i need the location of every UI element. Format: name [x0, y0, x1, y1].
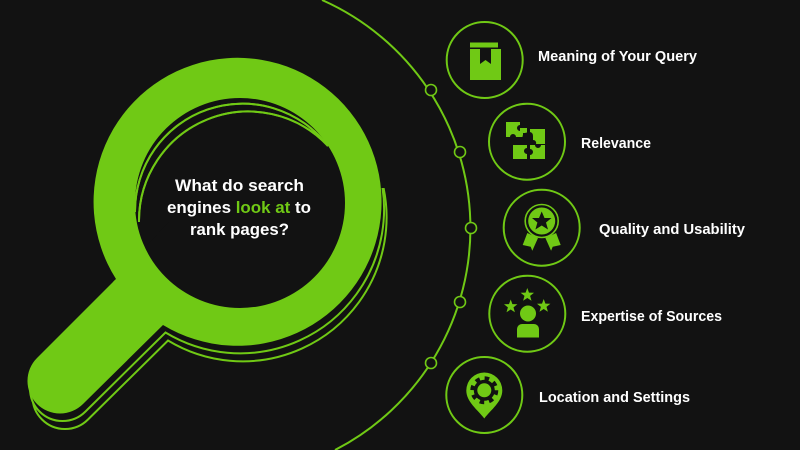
item: Relevance [489, 104, 651, 180]
item: Quality and Usability [504, 190, 745, 266]
title: rank pages? [190, 220, 289, 239]
label: Relevance [581, 136, 651, 152]
arc connector with nodes [322, 0, 476, 450]
icon: puzzle [506, 122, 545, 159]
label: Quality and Usability [599, 222, 745, 238]
icon: book [470, 42, 501, 80]
magnifying glass [27, 58, 387, 429]
label: Expertise of Sources [581, 309, 722, 325]
icon: expert with stars [504, 288, 550, 338]
title [167, 176, 311, 239]
label: Meaning of Your Query [538, 49, 697, 65]
item: Location and Settings [446, 357, 690, 433]
icon: award medal [523, 204, 561, 251]
item: Meaning of Your Query [447, 22, 697, 98]
item: Expertise of Sources [489, 276, 722, 352]
title: engines look at to [167, 198, 311, 217]
title: What do search [175, 176, 304, 195]
icon: location pin with gear [466, 372, 502, 418]
label: Location and Settings [539, 390, 690, 406]
